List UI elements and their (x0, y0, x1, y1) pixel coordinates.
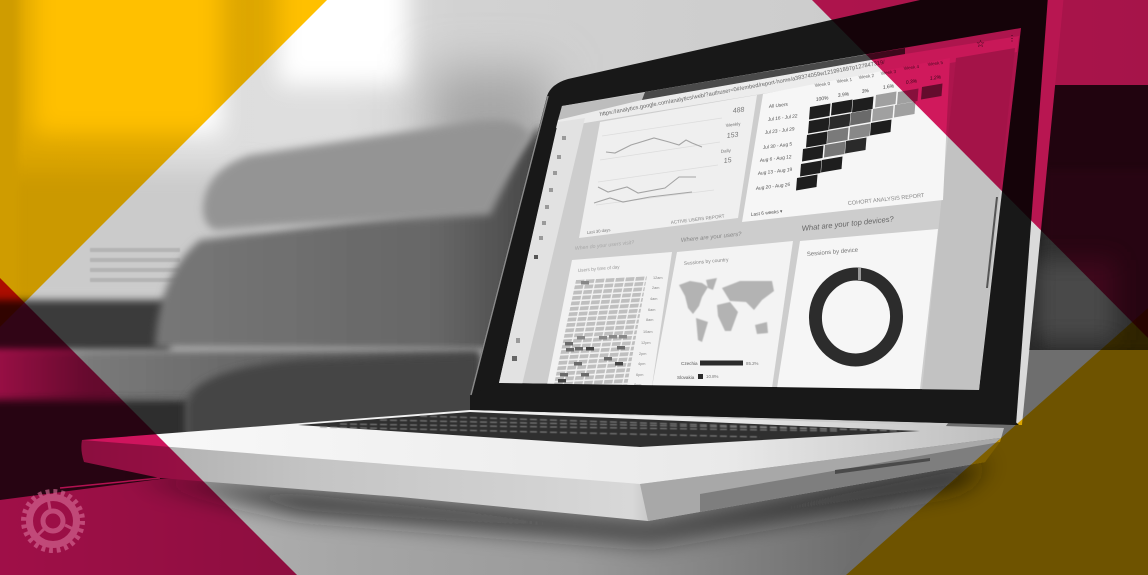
low dark band left (0, 300, 170, 352)
heatmap card: Users by time of day (578, 264, 620, 273)
heatmap card: 12pm (641, 341, 650, 345)
cohort percentages (815, 74, 942, 103)
radiator (90, 248, 180, 282)
donut chart (811, 270, 901, 364)
screen: What are your top devices? (801, 214, 895, 233)
country bars: Czechia (681, 361, 698, 366)
active users values (723, 107, 745, 165)
heatmap card: 8am (646, 318, 653, 322)
active users card: Last 30 days (587, 227, 611, 235)
heatmap card: 4am (650, 297, 657, 301)
heatmap card (547, 252, 672, 387)
cohort footer: COHORT ANALYSIS REPORT (848, 193, 925, 207)
active users values: 15 (723, 157, 732, 165)
active users card: Weekly (726, 121, 741, 128)
overlay: magenta triangle left (0, 278, 297, 575)
heatmap card: 8pm (634, 383, 641, 387)
right column (922, 48, 1015, 390)
heatmap card: 10am (643, 330, 652, 334)
sofa front cushion (185, 354, 480, 440)
bright window (278, 0, 408, 85)
lower wall shade (0, 170, 260, 310)
cohort row labels (755, 102, 798, 192)
port (835, 458, 930, 474)
right dark room (1000, 85, 1148, 353)
cohort column heads: Week 0 (814, 81, 831, 88)
active users card (579, 95, 757, 238)
section headings: When do your users visit? (575, 240, 635, 252)
active users values: 488 (732, 107, 745, 115)
cohort row labels: Aug 20 - Aug 26 (755, 182, 791, 192)
browser tab bar (642, 48, 905, 100)
cohort column heads: Week 3 (880, 69, 897, 76)
laptop (81, 0, 1064, 521)
sofa back (155, 125, 560, 350)
keyboard (298, 412, 920, 447)
overlay: yellow triangle bottom right (846, 308, 1148, 575)
sofa seat left (0, 350, 480, 405)
menu dots: ⋮ (1008, 34, 1016, 43)
overlay: yellow triangle (0, 0, 327, 327)
base front (81, 438, 1000, 521)
map card: Slovakia (677, 375, 695, 380)
cohort card: Last 6 weeks ▾ (751, 209, 783, 218)
overlay: magenta triangle top right (812, 0, 1148, 338)
wall shade behind laptop (430, 70, 550, 170)
active users footer: ACTIVE USERS REPORT (671, 213, 725, 225)
heatmap card: 6pm (636, 373, 643, 377)
cohort column heads (814, 60, 944, 88)
cohort column heads: Week 5 (927, 60, 944, 67)
table highlight (60, 478, 160, 488)
world map (679, 278, 774, 342)
cohort row labels: Jul 23 - Jul 29 (764, 126, 795, 136)
screen (499, 28, 1021, 390)
active users values: 153 (726, 132, 739, 140)
cohort column heads: Week 2 (858, 73, 875, 80)
sofa top cushion (203, 120, 530, 230)
cohort row labels: Jul 30 - Aug 5 (762, 141, 793, 151)
map card: 85.2% (746, 361, 759, 366)
cohort row labels: Aug 13 - Aug 19 (757, 167, 793, 177)
sidebar icons (512, 136, 566, 361)
gridlines (596, 118, 722, 205)
active users card: Daily (721, 148, 732, 154)
heatmap card: 4pm (638, 362, 645, 366)
map card: 10.8% (706, 374, 719, 379)
cohort row labels: Aug 6 - Aug 12 (759, 154, 792, 164)
table right (840, 350, 1148, 575)
heatmap card: 6am (648, 308, 655, 312)
lid bottom bezel (470, 383, 1019, 425)
lid silver edge (1016, 0, 1064, 425)
heatmap card: 2pm (639, 352, 646, 356)
sidebar (499, 118, 585, 385)
address bar (556, 36, 1019, 128)
cohort percentages: 1.2% (929, 74, 942, 82)
cohort percentages: 0.3% (905, 78, 918, 86)
cohort percentages: 3.9% (837, 91, 850, 99)
cohort grid (796, 84, 942, 190)
heatmap card: 12am (653, 276, 662, 280)
icon: gear logo (24, 492, 82, 550)
laptop lid (470, 0, 1050, 425)
cohort row labels: All Users (768, 102, 789, 110)
cohort column heads: Week 1 (836, 77, 853, 84)
url text: https://analytics.google.com/analytics/web/?authuser=0#/embed/report-home/a38374059w121991897p127847319/ (599, 60, 886, 118)
heatmap card: 2am (652, 286, 659, 290)
cohort card (742, 58, 950, 222)
active users lines (594, 138, 702, 203)
screen: Where are your users? (681, 232, 743, 244)
browser tab (558, 93, 645, 120)
cohort column heads: Week 4 (903, 64, 920, 71)
cohort percentages: 1.6% (882, 83, 895, 91)
cohort row labels: Jul 16 - Jul 22 (767, 113, 798, 123)
device card (777, 229, 938, 389)
cohort percentages: 3% (861, 88, 870, 95)
map card (652, 241, 793, 388)
map card: Sessions by country (684, 257, 729, 267)
window glow top-left (32, 0, 222, 135)
dark floor left (0, 398, 190, 515)
star icon: ☆ (976, 39, 985, 50)
laptop base (82, 410, 1004, 486)
scroll bar (986, 197, 998, 288)
device card: Sessions by device (807, 247, 859, 258)
laptop shadow on table (130, 462, 990, 540)
table surface (0, 440, 1148, 575)
cohort percentages: 100% (815, 95, 829, 103)
